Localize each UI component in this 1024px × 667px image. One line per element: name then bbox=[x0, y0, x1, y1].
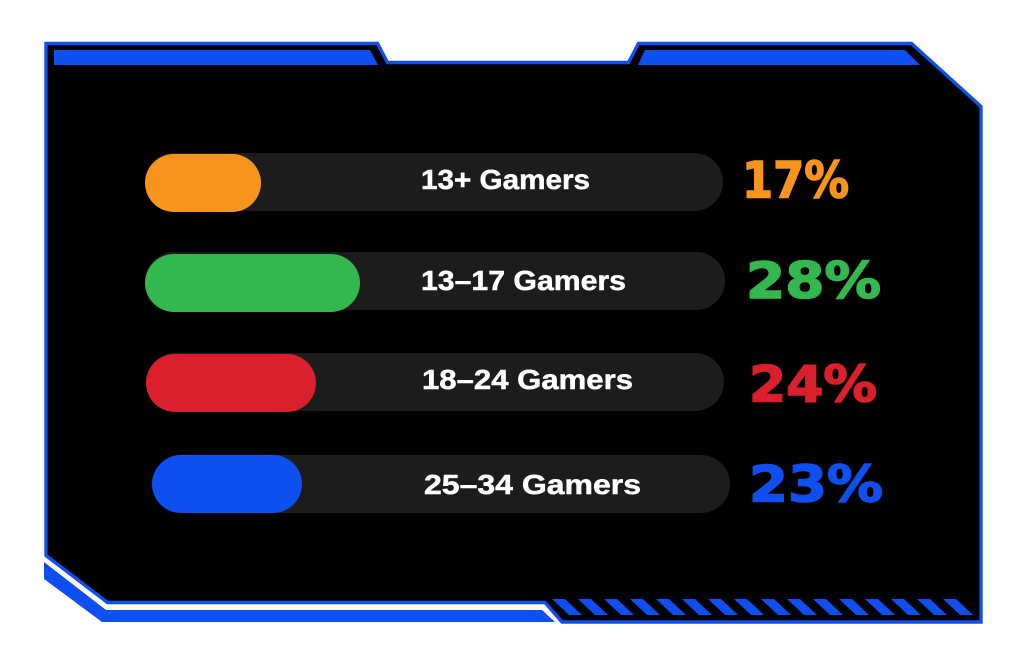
top right frame bar bbox=[638, 50, 920, 65]
track bbox=[145, 252, 725, 310]
value: 24% bbox=[749, 356, 877, 414]
label: 13+ Gamers bbox=[421, 164, 590, 195]
bar bbox=[145, 154, 261, 212]
value: 23% bbox=[749, 456, 883, 514]
track bbox=[146, 353, 724, 411]
bar bbox=[145, 254, 360, 312]
label: 18–24 Gamers bbox=[422, 364, 633, 395]
bar bbox=[146, 354, 316, 412]
track bbox=[145, 153, 723, 211]
value: 17% bbox=[742, 152, 849, 210]
row: 18-24 Gamers bbox=[146, 353, 877, 414]
row: 13-17 Gamers bbox=[145, 252, 881, 312]
track bbox=[152, 455, 730, 513]
label: 25–34 Gamers bbox=[424, 469, 641, 500]
top left frame bar bbox=[54, 50, 378, 65]
label: 13–17 Gamers bbox=[421, 265, 626, 296]
panel: black HUD frame bbox=[44, 44, 981, 622]
bottom left frame band bbox=[44, 562, 555, 622]
row: 25-34 Gamers bbox=[152, 455, 883, 514]
bottom right hazard stripes bbox=[552, 599, 973, 615]
bar bbox=[152, 455, 302, 513]
row: 13+ Gamers bbox=[145, 152, 849, 212]
value: 28% bbox=[746, 252, 881, 310]
